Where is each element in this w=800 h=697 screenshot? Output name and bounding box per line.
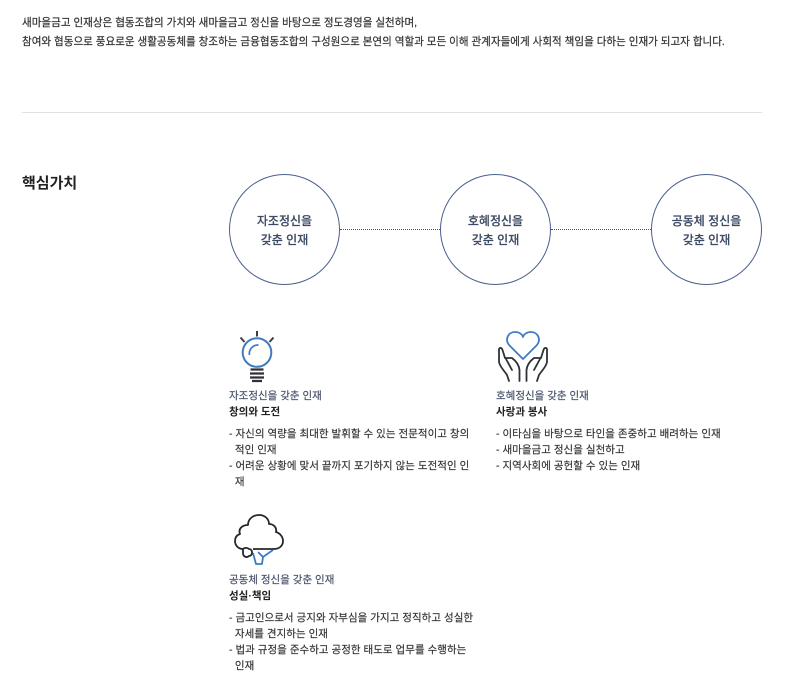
- circle: self-reliance: 갖춘 인재: [261, 233, 308, 247]
- block: community details: [229, 574, 473, 672]
- block: self-reliance details: 적인 인재: [235, 444, 277, 456]
- circle: self-reliance: [229, 174, 340, 285]
- block: mutual benefit details: - 새마을금고 정신을 실천하고: [496, 444, 625, 456]
- heading: core values: 핵심가치: [22, 175, 77, 192]
- block: self-reliance details: - 자신의 역량을 최대한 발휘할 수 있는 전문적이고 창의: [229, 428, 469, 440]
- block: community details: 공동체 정신을 갖춘 인재: [229, 574, 334, 586]
- block: community details: 인재: [235, 660, 254, 672]
- block: self-reliance details: 자조정신을 갖춘 인재: [229, 390, 322, 402]
- circle: mutual benefit: 갖춘 인재: [472, 233, 519, 247]
- icon: tree: [234, 514, 284, 565]
- intro text: [22, 16, 725, 48]
- block: community details: - 법과 규정을 준수하고 공정한 태도로 업무를 수행하는: [229, 644, 466, 656]
- block: community details: 자세를 견지하는 인재: [235, 628, 328, 640]
- icon: heart in hands: [498, 331, 548, 382]
- block: mutual benefit details: 사랑과 봉사: [496, 406, 547, 418]
- block: self-reliance details: 창의와 도전: [229, 406, 280, 418]
- intro text: 새마을금고 인재상은 협동조합의 가치와 새마을금고 정신을 바탕으로 정도경영을 실천하며,: [22, 17, 417, 29]
- block: self-reliance details: 재: [235, 476, 245, 488]
- block: community details: 성실·책임: [229, 590, 271, 602]
- block: mutual benefit details: - 이타심을 바탕으로 타인을 존중하고 배려하는 인재: [496, 428, 721, 440]
- circle: community: 갖춘 인재: [683, 233, 730, 247]
- icon: light bulb: [240, 331, 274, 382]
- block: mutual benefit details: - 지역사회에 공헌할 수 있는 인재: [496, 460, 640, 472]
- circle: community: [651, 174, 762, 285]
- circle: mutual benefit: [440, 174, 551, 285]
- block: self-reliance details: [229, 390, 469, 488]
- circle: mutual benefit: 호혜정신을: [468, 214, 523, 228]
- block: mutual benefit details: [496, 390, 721, 472]
- circle: self-reliance: 자조정신을: [257, 214, 312, 228]
- circle: community: 공동체 정신을: [672, 214, 741, 228]
- block: community details: - 금고인으로서 긍지와 자부심을 가지고 정직하고 성실한: [229, 612, 473, 624]
- block: self-reliance details: - 어려운 상황에 맞서 끝까지 포기하지 않는 도전적인 인: [229, 460, 469, 472]
- intro text: 참여와 협동으로 풍요로운 생활공동체를 창조하는 금융협동조합의 구성원으로 본연의 역할과 모든 이해 관계자들에게 사회적 책임을 다하는 인재가 되고자 합니다.: [22, 36, 725, 48]
- block: mutual benefit details: 호혜정신을 갖춘 인재: [496, 390, 589, 402]
